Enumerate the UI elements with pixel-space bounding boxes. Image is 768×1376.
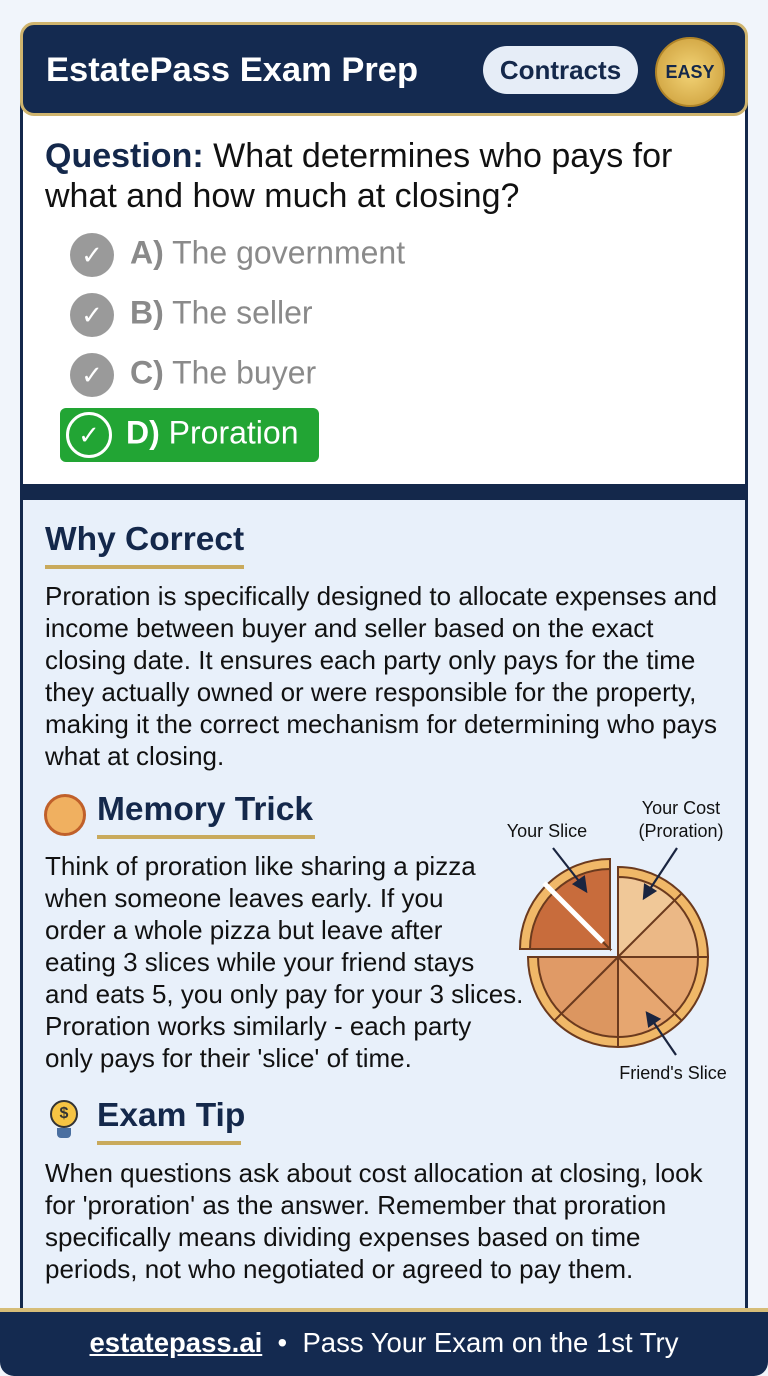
option B: ✓ [81,300,103,330]
icon: lightbulb [50,1100,78,1138]
text: exam tip: When questions ask about cost allocation at closing, look [45,1158,703,1188]
text: memory trick: and eats 5, you only pay for your 3 slices. [45,979,523,1009]
option D correct: D) Proration [126,414,298,450]
explanation panel [23,500,745,1308]
text: memory trick: eating 3 slices while your friend stays [45,947,474,977]
badge: EASY [655,37,725,107]
text: why correct: what at closing. [45,741,224,771]
pizza chart: Your Cost [642,798,720,818]
question [45,137,672,215]
header [20,22,748,116]
pizza chart: (Proration) [638,821,724,841]
text: why correct: income between buyer and seller based on the exact [45,613,654,643]
option C: C) The buyer [130,354,316,390]
text: memory trick: Proration works similarly - each party [45,1011,471,1041]
pizza chart [507,798,727,1083]
pizza chart: Your Slice [507,821,587,841]
footer [0,1308,768,1376]
text: why correct: making it the correct mechanism for determining who pays [45,709,717,739]
text: exam tip: periods, not who negotiated or agreed to pay them. [45,1254,633,1284]
icon: pizza [44,794,86,836]
badge: EASY: EASY [665,62,715,82]
text: memory trick [45,851,523,1073]
text: memory trick: order a whole pizza but leave after [45,915,442,945]
icon: lightbulb: $ [60,1105,68,1122]
option D correct: ✓ [78,420,100,450]
heading: Why Correct: Why Correct [45,521,244,558]
options [60,233,405,462]
text: why correct: closing date. It ensures each party only pays for the time [45,645,695,675]
option B: B) The seller [130,294,313,330]
option B [70,293,313,337]
footer: estatepass.ai • Pass Your Exam on the 1st Try [90,1327,678,1358]
title: EstatePass Exam Prep [46,51,418,89]
text: why correct: they actually owned or were responsible for the property, [45,677,696,707]
text: memory trick: Think of proration like sharing a pizza [45,851,476,881]
text: memory trick: when someone leaves early. If you [45,883,443,913]
text: exam tip: for 'proration' as the answer. Remember that proration [45,1190,666,1220]
text: why correct: Proration is specifically designed to allocate expenses and [45,581,717,611]
option A [70,233,405,277]
question: what and how much at closing? [45,177,519,215]
pill: Contracts: Contracts [500,55,621,85]
divider [20,484,748,500]
heading: Exam Tip: Exam Tip [97,1097,245,1134]
text: memory trick: only pays for their 'slice' of time. [45,1043,412,1073]
heading: Memory Trick: Memory Trick [97,791,313,828]
question: Question: What determines who pays for [45,137,672,175]
option D correct [60,408,319,462]
option A: A) The government [130,234,405,270]
text: why correct [45,581,717,771]
pizza chart: Friend's Slice [619,1063,727,1083]
option A: ✓ [81,240,103,270]
text: exam tip [45,1158,703,1284]
pill: Contracts [483,46,638,94]
text: exam tip: specifically means dividing expenses based on time [45,1222,640,1252]
option C [70,353,316,397]
option C: ✓ [81,360,103,390]
